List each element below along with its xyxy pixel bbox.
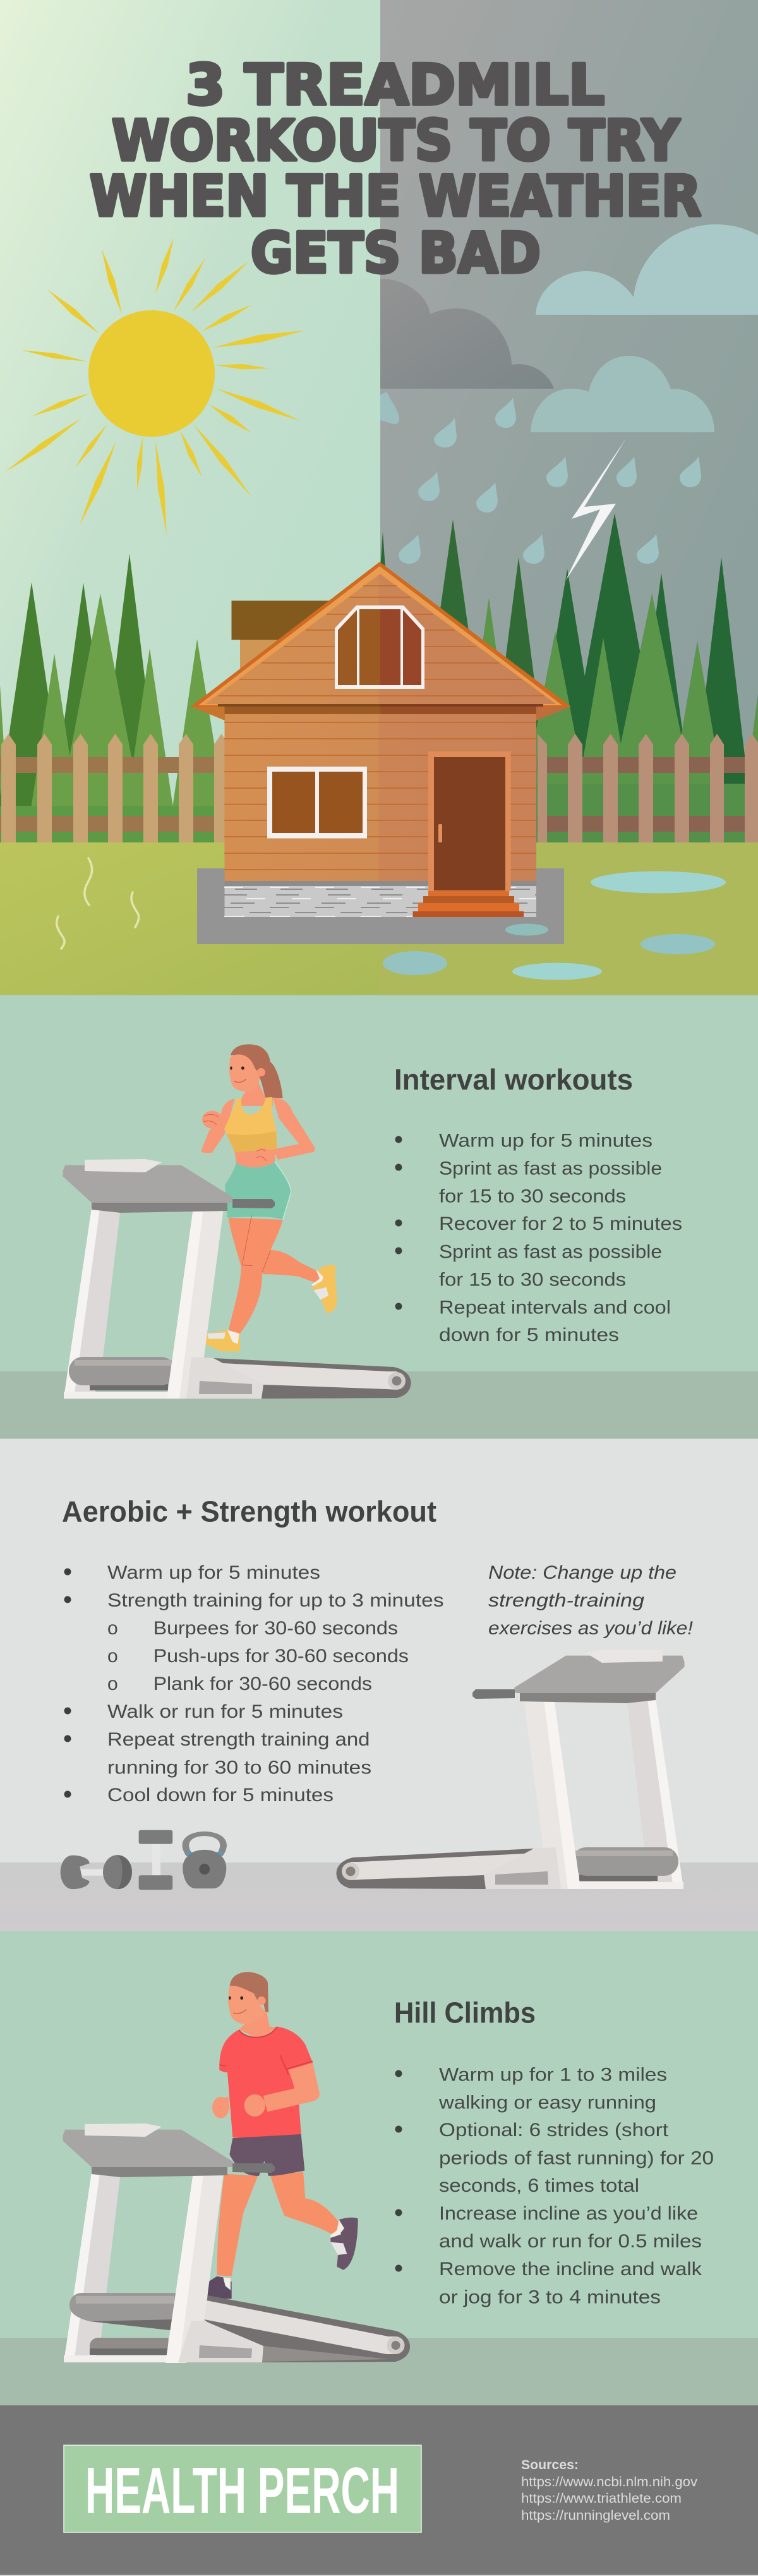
- title: WHEN THE WEATHER: [90, 164, 701, 229]
- under-eave band: [218, 704, 543, 714]
- foundation: [224, 881, 536, 917]
- panel background: [0, 1931, 758, 2405]
- bulleted list: and walk or run for 0.5 miles: [439, 2231, 702, 2252]
- logo: health perch: [64, 2445, 421, 2532]
- treadmill flat: [63, 1159, 411, 1399]
- ground floor window: [267, 767, 367, 838]
- bulleted list: Burpees for 30-60 seconds: [153, 1618, 398, 1639]
- roof inner trim: [198, 566, 562, 705]
- sunny sky: [0, 0, 380, 847]
- steps: [413, 891, 524, 917]
- bulleted list: Push-ups for 30-60 seconds: [153, 1646, 409, 1667]
- bottom edge: [0, 2575, 758, 2576]
- icon: puddles: [383, 871, 726, 980]
- bulleted list: Strength training for up to 3 minutes: [107, 1590, 443, 1611]
- bulleted list: Sprint as fast as possible: [439, 1158, 662, 1179]
- bulleted list: Repeat intervals and cool: [439, 1297, 671, 1318]
- gable siding: [219, 586, 544, 696]
- panel background: [0, 1438, 758, 1931]
- note: exercises as you’d like!: [488, 1618, 694, 1639]
- title: WORKOUTS TO TRY: [112, 108, 680, 173]
- bulleted list: Remove the incline and walk: [439, 2259, 702, 2280]
- treadmill mirrored: [336, 1649, 685, 1889]
- bulleted list: Recover for 2 to 5 minutes: [439, 1213, 682, 1234]
- bulleted list: walking or easy running: [438, 2093, 656, 2113]
- bulleted list: Repeat strength training and: [107, 1729, 370, 1750]
- title: [90, 52, 701, 286]
- bulleted list: Warm up for 5 minutes: [107, 1562, 320, 1583]
- bulleted list: Increase incline as you’d like: [439, 2203, 698, 2224]
- icon: vertical dumbbell: [139, 1830, 172, 1890]
- bulleted list: Plank for 30-60 seconds: [153, 1674, 372, 1694]
- icon: upper right cloud: [536, 224, 758, 315]
- sources: https://www.ncbi.nlm.nih.gov: [521, 2475, 698, 2489]
- bulleted list: [395, 2064, 714, 2308]
- gable: [205, 574, 556, 704]
- icon: dark storm cloud: [380, 279, 554, 389]
- house walls: [225, 704, 536, 881]
- floor: [0, 1862, 758, 1931]
- bulleted list: Warm up for 1 to 3 miles: [439, 2064, 667, 2085]
- attic window: [335, 605, 424, 689]
- icon: lightning bolt: [565, 439, 626, 581]
- title: GETS BAD: [251, 221, 541, 286]
- panel: aerobic and strength workout: [0, 1438, 758, 1931]
- bulleted list: running for 30 to 60 minutes: [107, 1757, 371, 1778]
- treadmill inclined: [63, 2123, 410, 2363]
- heading: Interval workouts: [394, 1063, 633, 1096]
- sources: [521, 2458, 698, 2523]
- bulleted list: for 15 to 30 seconds: [439, 1186, 626, 1207]
- grass lawn: [0, 842, 758, 995]
- heading: Aerobic + Strength workout: [62, 1495, 436, 1528]
- note: Note: Change up the: [488, 1562, 677, 1583]
- door: [428, 751, 511, 891]
- bulleted list: down for 5 minutes: [439, 1325, 619, 1346]
- floor: [0, 1371, 758, 1438]
- bulleted list: [395, 1130, 682, 1346]
- heading: Hill Climbs: [394, 1996, 536, 2029]
- icon: horizontal dumbbell: [61, 1855, 132, 1889]
- bulleted list: or jog for 3 to 4 minutes: [439, 2287, 661, 2308]
- icon: heat squiggles: [57, 858, 139, 949]
- icon: weights: [61, 1830, 226, 1890]
- bulleted list: [64, 1562, 443, 1806]
- roof outline: [191, 562, 571, 707]
- sources: Sources:: [521, 2458, 579, 2472]
- panel: footer: [0, 2405, 758, 2576]
- panel: interval workouts: [0, 995, 758, 1438]
- panel: weather hero scene: [0, 0, 758, 995]
- title: 3 TREADMILL: [186, 52, 605, 118]
- runner: woman: [201, 1044, 337, 1351]
- panel background: [0, 995, 758, 1438]
- bulleted list: seconds, 6 times total: [439, 2175, 639, 2196]
- bulleted list: o: [107, 1618, 118, 1639]
- bulleted list: Warm up for 5 minutes: [439, 1130, 653, 1151]
- house: [191, 562, 571, 917]
- runner: man: [207, 1972, 358, 2299]
- bulleted list: Optional: 6 strides (short: [439, 2120, 669, 2141]
- footer background: [0, 2405, 758, 2575]
- sources: https://www.triathlete.com: [521, 2491, 682, 2506]
- icon: kettlebell: [183, 1833, 226, 1888]
- trees: left forest: [0, 554, 231, 847]
- bulleted list: o: [107, 1674, 118, 1694]
- chimney: [231, 600, 339, 709]
- trees: right forest: [361, 513, 758, 847]
- roof eaves: [191, 707, 571, 720]
- bulleted list: Cool down for 5 minutes: [107, 1785, 334, 1806]
- bulleted list: for 15 to 30 seconds: [439, 1269, 626, 1291]
- icon: lower rain cloud: [531, 356, 714, 432]
- note: strength-training: [488, 1590, 644, 1611]
- note: [488, 1562, 694, 1639]
- bulleted list: Walk or run for 5 minutes: [107, 1701, 343, 1722]
- icon: raindrops: [380, 392, 701, 564]
- bulleted list: o: [107, 1646, 118, 1667]
- icon: sun: [5, 238, 304, 535]
- stormy sky: [380, 0, 758, 847]
- panel: hill climbs: [0, 1931, 758, 2405]
- bulleted list: periods of fast running) for 20: [439, 2148, 714, 2169]
- floor: [0, 2338, 758, 2405]
- concrete pad: [197, 868, 564, 944]
- bulleted list: Sprint as fast as possible: [439, 1241, 662, 1262]
- sources: https://runninglevel.com: [521, 2508, 670, 2523]
- fence: [0, 734, 758, 842]
- logo: health perch: HEALTH PERCH: [85, 2454, 399, 2527]
- siding lines: [224, 722, 536, 870]
